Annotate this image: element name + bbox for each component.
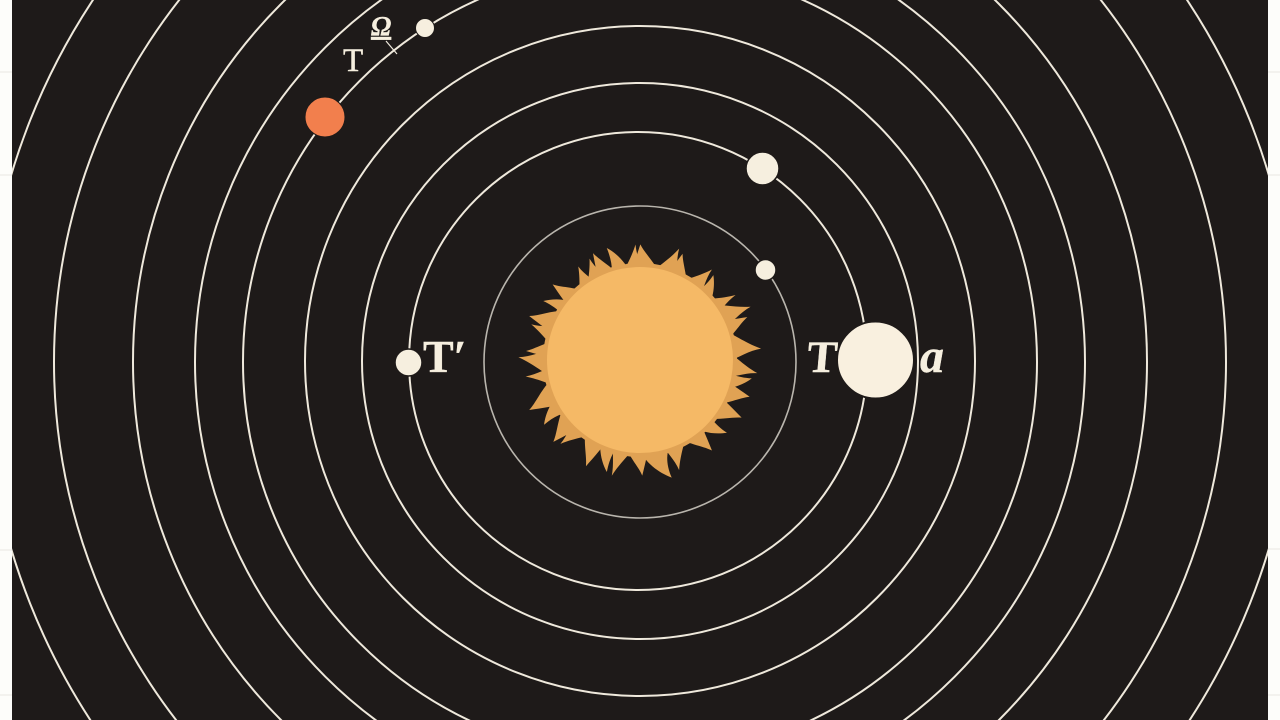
label: omega: Ω bbox=[371, 11, 391, 41]
label: small T: T bbox=[343, 43, 363, 79]
sun bbox=[518, 243, 762, 482]
sun flares bbox=[518, 243, 762, 482]
planet: small inner bbox=[755, 260, 776, 280]
tick mark bbox=[386, 41, 397, 54]
label: a: a bbox=[920, 330, 944, 383]
sun disc bbox=[547, 267, 733, 453]
planet: small top bbox=[416, 18, 434, 38]
label: T right: T bbox=[805, 332, 840, 382]
planet: left bbox=[395, 349, 422, 376]
planet: orange bbox=[305, 97, 345, 137]
label: T prime: T′ bbox=[423, 331, 467, 382]
planet: large bbox=[837, 322, 914, 398]
planet: upper right bbox=[746, 152, 779, 185]
